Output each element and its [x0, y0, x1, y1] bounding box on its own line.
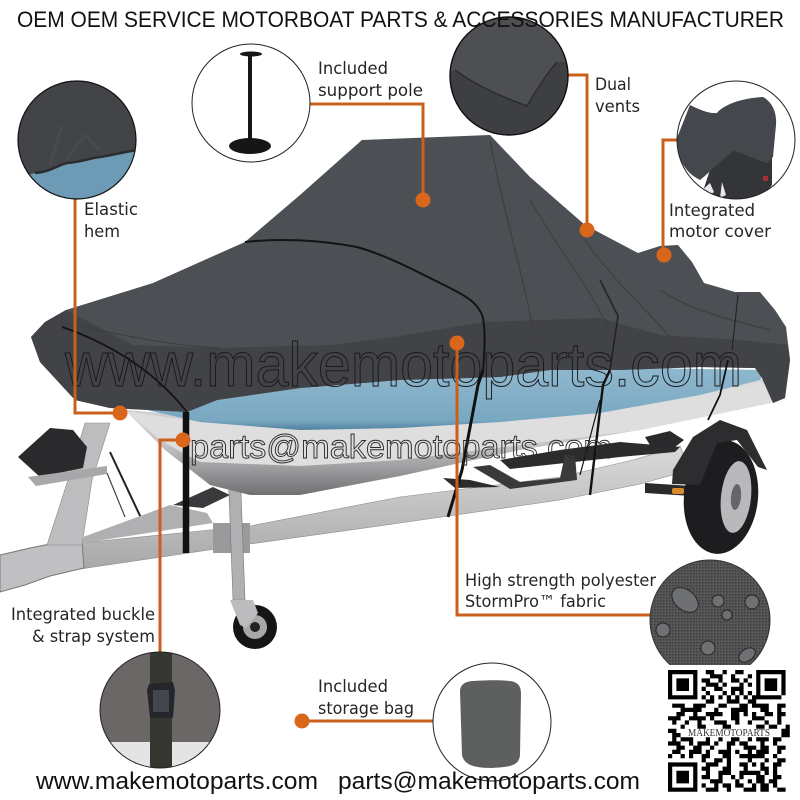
callout dots: [112, 192, 672, 728]
footer website and email: parts@makemotoparts.com: [338, 768, 640, 795]
footer website and email: [35, 768, 640, 795]
label: storage bag: storage bag: [318, 699, 414, 718]
watermark large: www.makemotoparts.com: [64, 331, 742, 400]
strap 3 lower wire: [580, 400, 600, 475]
watermark small: parts@makemotoparts.com: [190, 428, 612, 465]
callout lines: [75, 75, 678, 721]
hem edge: [35, 150, 140, 173]
label: storage bag: Included: [318, 677, 388, 696]
footer website and email: www.makemotoparts.com: [35, 768, 318, 795]
inset: storage bag: [433, 663, 551, 781]
label: dual vents: Dual: [595, 75, 631, 94]
bow seam: [62, 327, 187, 412]
winch: [18, 428, 87, 477]
label: support pole: Included: [318, 59, 388, 78]
inset: support pole: [192, 44, 310, 162]
buckle: [147, 682, 175, 718]
jack clamp: [213, 523, 250, 553]
label: elastic hem: Elastic: [84, 200, 138, 219]
strap 4: [708, 360, 728, 420]
line: buckle: [160, 440, 183, 652]
inset border: elastic hem: [18, 81, 136, 199]
label: support pole: [318, 59, 423, 100]
buckle centre: [153, 690, 169, 712]
jack wheel: [230, 600, 277, 649]
cover seam: [245, 240, 485, 372]
pole base: [229, 138, 271, 154]
middle seam: [600, 280, 618, 370]
vent opening edge: [455, 62, 557, 106]
winch stand: [47, 423, 110, 545]
line: elastic hem: [75, 197, 120, 413]
QR modules: [668, 672, 790, 790]
line: fabric: [457, 343, 651, 615]
vent flap: [451, 18, 566, 105]
tie-down wires: [110, 452, 142, 520]
motor hood: [677, 97, 776, 180]
label: motor cover: [669, 201, 771, 241]
blue hull stripe: [125, 365, 765, 430]
label: dual vents: [595, 75, 640, 116]
hull white band: [125, 382, 773, 466]
label: elastic hem: [84, 200, 138, 241]
line: dual vents: [567, 75, 587, 230]
motor leg: [704, 151, 772, 198]
inset: fabric: [650, 560, 770, 665]
inset: buckle: [100, 650, 220, 772]
label: fabric: StormPro™ fabric: [465, 592, 606, 611]
hull wedge: [110, 742, 210, 767]
trailer tyre: [678, 436, 764, 558]
bunks and axle: [500, 442, 680, 469]
darker cover skirt: [31, 310, 790, 412]
label: motor cover: motor cover: [669, 222, 771, 241]
inset: motor cover: [678, 97, 776, 198]
inset border: fabric: [650, 560, 770, 680]
diagonal trailer brace: [83, 505, 213, 543]
motor white parts: [704, 182, 726, 197]
bunk pad: [645, 431, 684, 447]
fender: [672, 420, 767, 485]
QR code: [662, 665, 796, 797]
winch arm: [28, 466, 107, 486]
boat hull: [125, 370, 773, 495]
label: buckle: [11, 605, 155, 646]
inset border: motor cover: [677, 81, 795, 199]
strap 2: [448, 370, 483, 517]
hem folds: [50, 125, 100, 165]
label: fabric: [465, 571, 656, 611]
blue hull in hem inset: [30, 152, 134, 198]
cover folds: [60, 140, 770, 350]
label: fabric: High strength polyester: [465, 571, 656, 590]
pole cap: [240, 52, 262, 56]
line: motor cover: [663, 140, 678, 255]
label: support pole: support pole: [318, 81, 423, 100]
cover body: [31, 135, 790, 412]
pole shaft: [248, 54, 252, 142]
label: buckle: & strap system: [32, 627, 155, 646]
label: storage bag: [318, 677, 414, 718]
boat cover: [31, 135, 790, 412]
red marker: [763, 176, 768, 181]
dashed wire: [107, 473, 125, 517]
marker light: [672, 488, 684, 494]
QR label: MAKEMOTOPARTS: [688, 727, 770, 739]
label: elastic hem: hem: [84, 222, 120, 241]
front strap: [183, 412, 189, 553]
inset border: buckle: [100, 652, 220, 768]
left bunk: [443, 478, 500, 488]
label: motor cover: Integrated: [669, 201, 755, 220]
label: dual vents: vents: [595, 97, 640, 116]
strap 3: [590, 370, 610, 495]
trailer: [0, 420, 767, 649]
line: support pole: [310, 104, 423, 200]
inset border: dual vents: [450, 17, 568, 135]
label: buckle: Integrated buckle: [11, 605, 155, 624]
bag: [460, 680, 521, 768]
cross truss: [473, 455, 577, 489]
inset: elastic hem: [17, 80, 140, 200]
trailer tongue and coupler: [0, 541, 84, 592]
trailer main beam: [80, 446, 690, 569]
leaf spring: [645, 483, 707, 497]
bunk bracket: [173, 487, 230, 508]
inset: dual vents: [448, 15, 570, 137]
water droplets: [656, 583, 759, 665]
strap: [150, 650, 172, 770]
tie-down straps: [186, 360, 728, 553]
rear seam: [732, 295, 738, 350]
title: OEM OEM SERVICE MOTORBOAT PARTS & ACCESSORIES MANUFACTURER: [17, 7, 784, 32]
line: storage bag: [302, 720, 433, 722]
jack post: [228, 467, 245, 600]
